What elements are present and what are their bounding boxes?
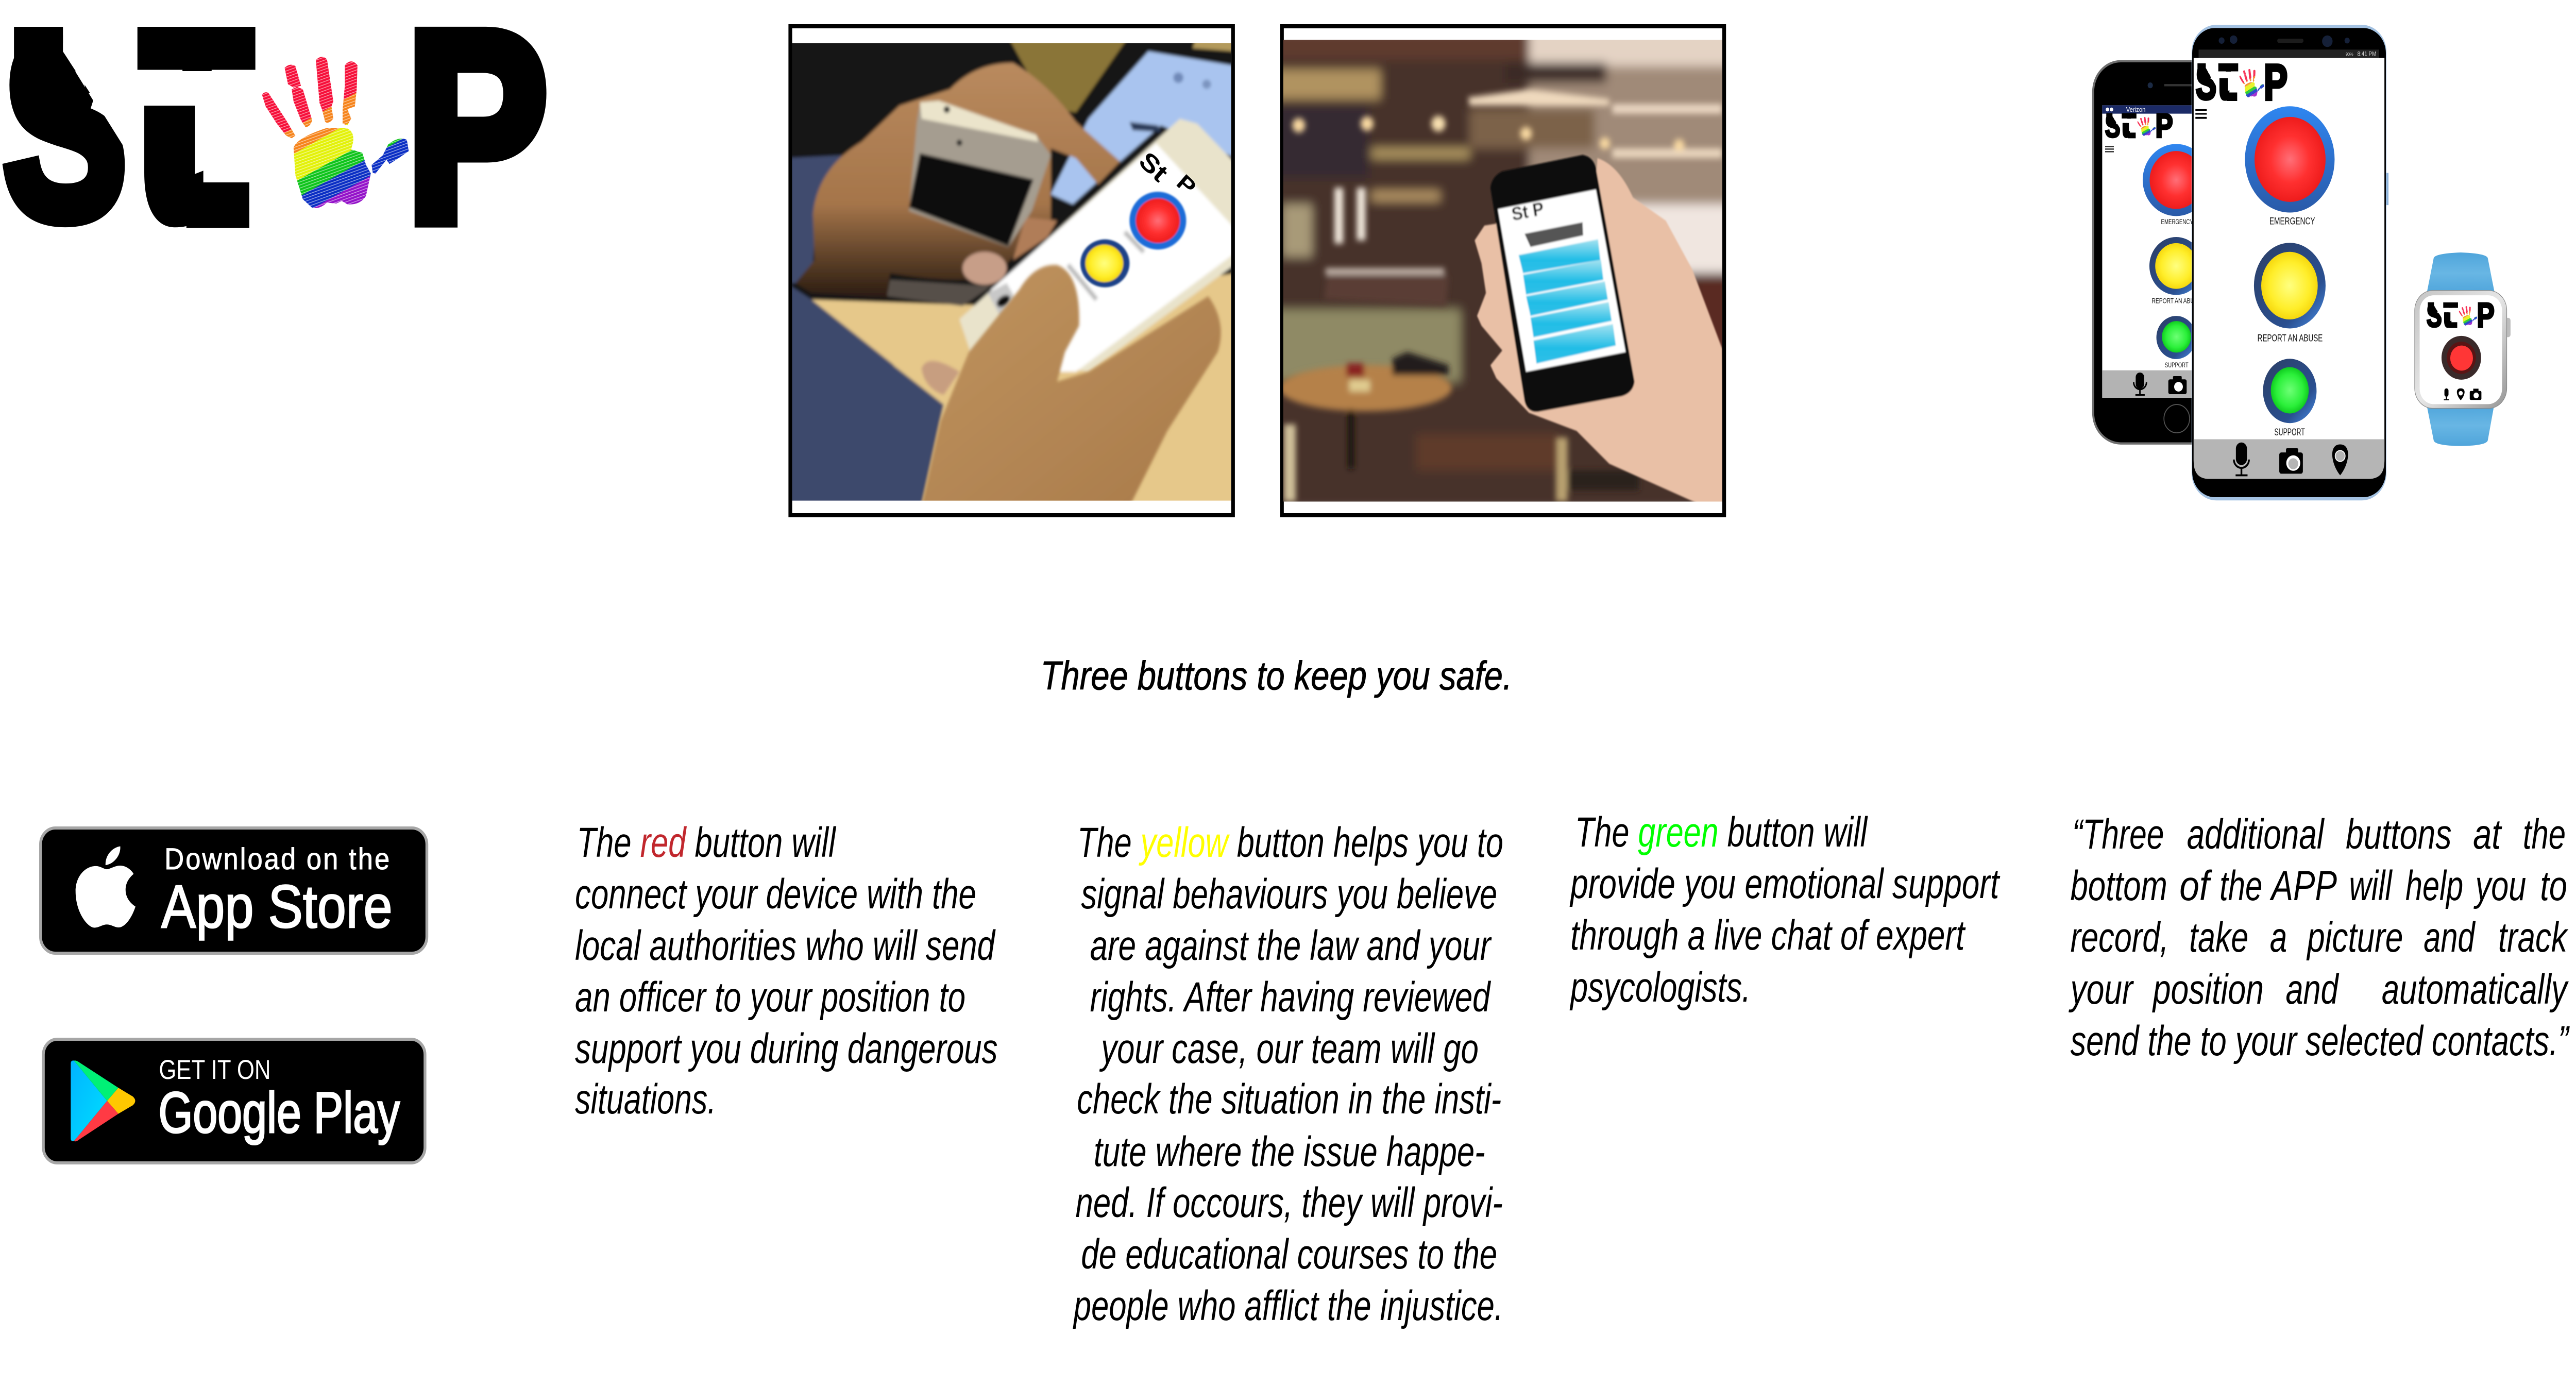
icon: rainbow hand [262, 57, 409, 208]
phone: back iPhone: Verizon [2126, 106, 2145, 113]
text block: yellow button: ned. If occours, they will provi- [1076, 1179, 1503, 1226]
text block: yellow button [1073, 819, 1503, 1329]
button: emergency: EMERGENCY [2269, 215, 2315, 227]
photo: hand holding phone in cafe: St P [1510, 198, 1545, 225]
text block: additional buttons: take [2189, 914, 2248, 961]
mini logo: front phone: S [2196, 55, 2216, 109]
text block: yellow button: The yellow button helps you to [1077, 819, 1503, 866]
mini logo: front phone: T [2218, 48, 2239, 129]
text block: red button: local authorities who will send [575, 922, 996, 969]
text block: green button: through a live chat of expert [1570, 911, 1966, 959]
text block: additional buttons: “Three [2072, 810, 2164, 858]
text block: additional buttons: your [2069, 966, 2134, 1013]
badge: App Store: App Store [161, 872, 393, 940]
text block: additional buttons: and [2286, 966, 2340, 1013]
text block: green button [1570, 808, 2001, 1011]
text block: red button: an officer to your position to [575, 973, 965, 1021]
mini logo: front phone [2196, 42, 2287, 129]
text block: red button: situations. [575, 1075, 716, 1123]
button: report an abuse: REPORT AN ABUSE [2258, 332, 2323, 344]
icon: location pin [2332, 444, 2348, 475]
phone: back iPhone: REPORT AN ABUSE [2151, 297, 2201, 305]
text block: additional buttons [2069, 810, 2570, 1064]
text block: additional buttons: will [2349, 862, 2393, 909]
text block: red button: connect your device with the [575, 870, 976, 918]
logo: STOP with rainbow hand [4, 0, 547, 375]
status bar clock: 8:41 PM [2358, 51, 2376, 58]
text block: yellow button: are against the law and your [1090, 922, 1492, 969]
text block: additional buttons: additional [2187, 810, 2325, 858]
phone: back iPhone: SUPPORT [2165, 361, 2189, 369]
text block: additional buttons: help [2405, 862, 2463, 909]
text block: additional buttons: position [2152, 966, 2264, 1013]
mini logo: back phone: P [2156, 108, 2173, 145]
text block: additional buttons: to [2540, 862, 2567, 909]
text block: additional buttons: bottom [2071, 862, 2167, 909]
text block: red button [575, 819, 998, 1123]
text block: green button: psycologists. [1570, 964, 1751, 1011]
phone: back iPhone: EMERGENCY [2161, 217, 2193, 226]
mini logo: watch: t [2443, 289, 2451, 336]
tagline: Three buttons to keep you safe. [1041, 653, 1512, 698]
icon: camera [2279, 448, 2303, 474]
mini logo: watch: P [2477, 296, 2495, 334]
text block: additional buttons: record, [2071, 914, 2168, 961]
text block: yellow button: rights. After having reviewed [1090, 973, 1492, 1021]
icons: watch actions [2444, 388, 2481, 400]
watch [2415, 252, 2511, 446]
mini logo: watch: S [2427, 297, 2442, 334]
text block: additional buttons: a [2270, 914, 2287, 961]
mini logo: front phone: P [2264, 54, 2287, 110]
badge: Google Play: Google Play [159, 1080, 400, 1145]
mini logo: front phone: t [2218, 42, 2229, 112]
text block: yellow button: signal behaviours you believe [1081, 870, 1497, 918]
mini logo on phone screen: St [1133, 146, 1173, 188]
device mockups: phones and watch [2093, 25, 2511, 500]
text block: green button: provide you emotional support [1570, 860, 2001, 907]
phone: back iPhone [2092, 60, 2192, 445]
text block: additional buttons: you [2473, 862, 2526, 909]
icon: menu [2195, 109, 2207, 119]
mini logo: watch [2427, 289, 2495, 347]
text block: green button: The green button will [1575, 808, 1868, 856]
text block: additional buttons: picture [2307, 914, 2403, 961]
text block: additional buttons: the [2523, 810, 2566, 858]
text block: yellow button: your case, our team will go [1099, 1025, 1479, 1072]
photo: hands holding phone with app: P [1172, 170, 1201, 200]
text block: yellow button: check the situation in the insti- [1077, 1075, 1501, 1123]
mini logo: back phone: T [2122, 103, 2137, 157]
button: yellow [2149, 237, 2192, 295]
icon: play triangle [71, 1060, 135, 1141]
text block: red button: support you during dangerous [575, 1025, 998, 1072]
mini logo: back phone: S [2105, 107, 2121, 144]
mini logo: back phone: t [2122, 99, 2129, 146]
button: emergency [2245, 106, 2334, 227]
icon: microphone [2133, 373, 2146, 396]
button: report an abuse [2254, 243, 2326, 344]
phone: front Samsung [2192, 25, 2388, 500]
button: red [2142, 144, 2192, 216]
button: support: SUPPORT [2274, 426, 2305, 437]
text block: red button: The red button will [577, 819, 837, 866]
badge: App Store [41, 828, 427, 953]
text block: additional buttons: buttons [2346, 810, 2452, 858]
photo: hand holding phone in cafe [1274, 26, 1731, 515]
text block: additional buttons: APP [2269, 862, 2337, 909]
text block: additional buttons: of [2179, 862, 2213, 909]
badge: App Store: Download on the [164, 842, 389, 876]
text block: yellow button: tute where the issue happe- [1094, 1128, 1485, 1175]
text block: additional buttons: at [2473, 810, 2502, 858]
text block: additional buttons: the [2219, 862, 2262, 909]
text block: yellow button: de educational courses to the [1081, 1230, 1497, 1278]
phone: front Samsung: 90% [2346, 52, 2353, 57]
photo: hands holding phone with app [786, 26, 1236, 515]
badge: Google Play [43, 1039, 425, 1163]
mini logo: back phone [2105, 99, 2173, 157]
icon: apple [76, 846, 135, 927]
mini logo: watch: T [2443, 292, 2459, 347]
badge: Google Play: GET IT ON [159, 1054, 271, 1085]
text block: additional buttons: and [2424, 914, 2476, 961]
button: support [2263, 359, 2316, 437]
button: green [2157, 316, 2192, 359]
button: watch red [2442, 336, 2481, 380]
text block: yellow button: people who afflict the injustice. [1073, 1282, 1503, 1329]
icon: camera [2168, 376, 2187, 394]
icon: microphone [2234, 443, 2249, 476]
